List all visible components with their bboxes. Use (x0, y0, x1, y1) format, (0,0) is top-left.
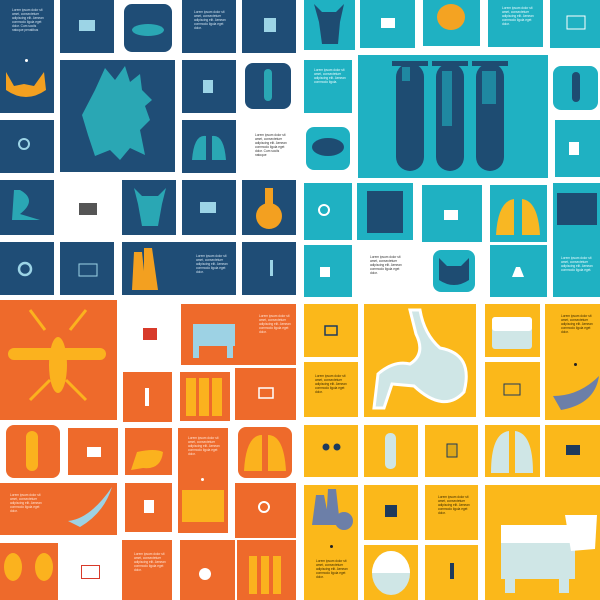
tile: thermometer (553, 66, 598, 110)
tile: folder and text: Lorem ipsum dolor sit amet, consectetuer adipiscing elit. Aenean commodo ligula eget. (561, 256, 593, 272)
tile: syringe (242, 242, 296, 295)
tile: document (555, 120, 600, 177)
tile: magnifier (235, 483, 296, 538)
tile: magnifier (304, 183, 352, 240)
tile: stomach (0, 180, 54, 235)
panel: top-right cyan (300, 0, 600, 300)
tile: thermometer (6, 425, 60, 478)
tile: flasks and text (304, 485, 358, 600)
tile: text (304, 60, 352, 113)
tile: text: Lorem ipsum dolor sit amet, consectetuer adipiscing elit. Aenean commodo ligula eget dolor. (134, 552, 166, 572)
tile: flask (490, 245, 547, 297)
tile: binders (242, 0, 296, 53)
tile: certificate (485, 362, 540, 417)
tile: briefcase (360, 0, 415, 48)
tile: test tubes (237, 540, 296, 600)
tile: rooster (60, 60, 175, 172)
tile: binders (357, 183, 413, 240)
tile: mosquito (0, 300, 117, 420)
tile: thermometer (364, 425, 418, 477)
tile: certificate (60, 242, 114, 295)
tile: text: Lorem ipsum dolor sit amet, consectetuer adipiscing elit. Aenean commodo ligula eget dolor. (502, 6, 534, 26)
panel: bottom-right yellow (300, 300, 600, 600)
tile: briefcase (60, 0, 114, 53)
tile: text: Lorem ipsum dolor sit amet, consectetuer adipiscing elit. Aenean commodo ligula eget dolor. (194, 10, 226, 30)
tile: text and wing: Lorem ipsum dolor sit amet, consectetuer adipiscing elit. Aenean commodo ligula eget dolor. (561, 314, 593, 334)
tile: folder (182, 180, 236, 235)
tile: text: Lorem ipsum dolor sit amet, consectetuer adipiscing elit. Aenean commodo ligula. (314, 68, 346, 84)
tile: document (425, 425, 478, 477)
tile: text: Lorem ipsum dolor sit amet, consectetuer adipiscing elit. Aenean commodo ligula eget dolor. (438, 495, 470, 515)
tile: text: Lorem ipsum dolor sit amet, consectetuer adipiscing elit. Aenean commodo ligula eget dolor. (315, 374, 347, 394)
tile: certificate (550, 0, 600, 48)
tile: stomach (304, 245, 352, 297)
tile: text and folder (178, 428, 228, 533)
tile: brain (423, 0, 480, 46)
tile: thermometer (245, 63, 291, 109)
tile: lungs (238, 427, 292, 478)
tile: kidneys (0, 543, 58, 600)
icon: small flasks (143, 328, 157, 340)
tile: magnifier (0, 120, 54, 173)
tile: text and wing (545, 304, 600, 420)
tile: lungs (490, 185, 547, 242)
tile: text and folder: Lorem ipsum dolor sit amet, consectetuer adipiscing elit. Aenean commodo ligula eget dolor. (188, 436, 220, 456)
tile: cow head (304, 0, 355, 50)
tile: text (488, 0, 543, 47)
tile: document (125, 483, 172, 532)
tile: computer (304, 304, 358, 357)
tile: briefcase (68, 428, 118, 475)
panel: bottom-left orange (0, 300, 300, 600)
tile: text and wing: Lorem ipsum dolor sit amet, consectetuer adipiscing elit. Aenean commodo ligula eget dolor. (10, 493, 42, 513)
tile: hat (306, 127, 350, 170)
tile: flask (242, 180, 296, 235)
tile: brain (364, 545, 418, 600)
tile: binders (180, 372, 230, 421)
tile: turtle (124, 4, 172, 52)
tile: text (122, 540, 172, 600)
tile: cow and text (181, 304, 296, 365)
tile: text and cat: Lorem ipsum dolor sit amet, consectetuer adipiscing elit. Aenean commodo ligula eget dolor. Cum sociis natoque penatibus (12, 8, 44, 32)
tile: text and wing (0, 483, 117, 535)
tile: cow and text: Lorem ipsum dolor sit amet, consectetuer adipiscing elit. Aenean commodo ligula eget dolor. (259, 314, 291, 334)
tile: text (304, 362, 358, 417)
tile: flasks and text (122, 242, 236, 295)
tile: document (182, 60, 236, 113)
tile: cow (485, 485, 600, 600)
tile: binders (364, 485, 418, 540)
icon: computer (79, 203, 97, 215)
tile: lungs (182, 120, 236, 173)
tile: lungs (485, 425, 540, 477)
tile: kidneys (304, 425, 358, 477)
tile: stomach (125, 428, 172, 475)
text white area: Lorem ipsum dolor sit amet, consectetuer adipiscing elit. Aenean commodo ligula eget dolor. Cum sociis natoque (255, 133, 287, 157)
tile: briefcase (485, 304, 540, 357)
tile: cow head (122, 180, 176, 235)
tile: flasks and text: Lorem ipsum dolor sit amet, consectetuer adipiscing elit. Aenean commodo ligula eget dolor. (316, 559, 348, 579)
text white area: Lorem ipsum dolor sit amet, consectetuer adipiscing elit. Aenean commodo ligula eget dolor. (370, 255, 402, 275)
tile: text (425, 485, 478, 540)
tile: flasks and text: Lorem ipsum dolor sit amet, consectetuer adipiscing elit. Aenean commodo ligula eget dolor. (196, 254, 228, 274)
tile: brain (180, 540, 235, 600)
tile: syringe (123, 372, 172, 422)
icon: certificate (81, 565, 100, 579)
tile: computer (422, 185, 482, 242)
tile: cat (433, 250, 475, 292)
panel: top-left dark blue (0, 0, 300, 300)
tile: text and cat (0, 0, 54, 113)
tile: computer (235, 368, 296, 420)
tile: text (182, 0, 236, 53)
tile: chat (0, 242, 54, 295)
tile: test tubes (358, 55, 548, 178)
tile: folder and text (553, 183, 600, 297)
tile: folder (545, 425, 600, 477)
tile: syringe (425, 545, 478, 600)
tile: stomach (364, 304, 476, 417)
